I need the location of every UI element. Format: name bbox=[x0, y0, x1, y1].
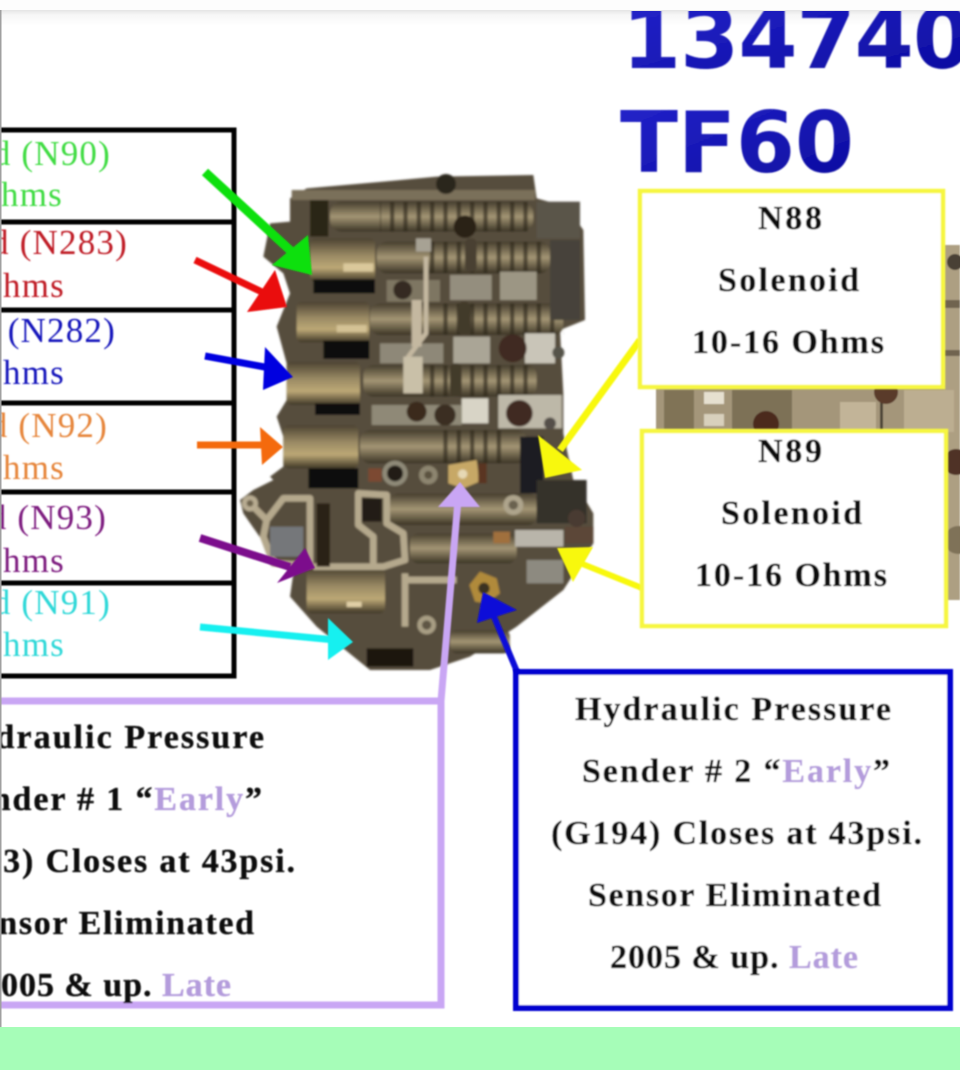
top screen strip bbox=[0, 0, 960, 26]
title: TF60 bbox=[620, 94, 854, 193]
callout: N89 solenoid: 10-16 Ohms bbox=[695, 557, 887, 594]
row: N90 bbox=[0, 134, 111, 214]
callout: N88 solenoid: 10-16 Ohms bbox=[692, 324, 884, 361]
blue box bbox=[516, 672, 950, 1008]
callout border with arrow to sender 1 bbox=[0, 482, 480, 1005]
table frame and row lines bbox=[0, 130, 234, 676]
arrow: green to N90 bbox=[205, 172, 312, 275]
arrow: orange to N92 bbox=[197, 427, 283, 465]
sender 2 text: Sensor Eliminated bbox=[588, 877, 881, 914]
solenoid table: left bbox=[0, 130, 234, 676]
lower left light casting outline bbox=[250, 493, 457, 627]
arrow: red to N283 bbox=[195, 260, 287, 312]
sender 2 text: Sender # 2 “Early” bbox=[582, 753, 890, 790]
bottom green band bbox=[0, 1027, 960, 1070]
row: N282 bbox=[0, 311, 116, 392]
callout: N89 solenoid: Solenoid bbox=[721, 495, 862, 532]
title bbox=[619, 11, 960, 174]
row: N283 bbox=[0, 223, 128, 305]
row: N91 bbox=[0, 583, 111, 664]
dark bolts bbox=[436, 174, 456, 194]
row: N92 bbox=[0, 406, 108, 487]
sender 2 text bbox=[551, 691, 922, 976]
row: N93 bbox=[0, 498, 107, 580]
background photo behind yellow boxes bbox=[656, 245, 960, 600]
callout: N88 solenoid: Solenoid bbox=[718, 262, 859, 299]
callout: N88 solenoid bbox=[640, 191, 943, 387]
sender 2 text: 2005 & up. Late bbox=[610, 939, 858, 976]
dark solenoid bases bbox=[313, 279, 375, 293]
arrow: blue to sender 2 bbox=[477, 592, 518, 674]
arrows and callout leaders bbox=[195, 172, 642, 674]
callout: hydraulic pressure sender 1 bbox=[0, 482, 480, 1005]
printed strip bbox=[408, 257, 426, 390]
arrow: purple to N93 bbox=[200, 538, 315, 583]
gold pressure senders bbox=[448, 460, 479, 488]
callout: N89 solenoid bbox=[642, 431, 946, 626]
left edge line bbox=[0, 10, 2, 1027]
sender 2 text: Hydraulic Pressure bbox=[575, 691, 891, 728]
arrow: yellow to N88 bbox=[538, 340, 640, 478]
valve body photo illustration bbox=[240, 174, 593, 670]
callout: N88 solenoid: N88 bbox=[758, 200, 822, 237]
solenoid tubes bbox=[310, 238, 375, 282]
sender 1 text bbox=[0, 719, 295, 1004]
arrow: cyan to N91 bbox=[200, 618, 353, 660]
arrow: yellow to N89 bbox=[557, 547, 642, 588]
callout: N89 solenoid: N89 bbox=[758, 433, 822, 470]
arrow: blue to N282 bbox=[205, 347, 293, 390]
callout: hydraulic pressure sender 2 bbox=[516, 672, 950, 1008]
sender 2 text: (G194) Closes at 43psi. bbox=[551, 815, 922, 852]
